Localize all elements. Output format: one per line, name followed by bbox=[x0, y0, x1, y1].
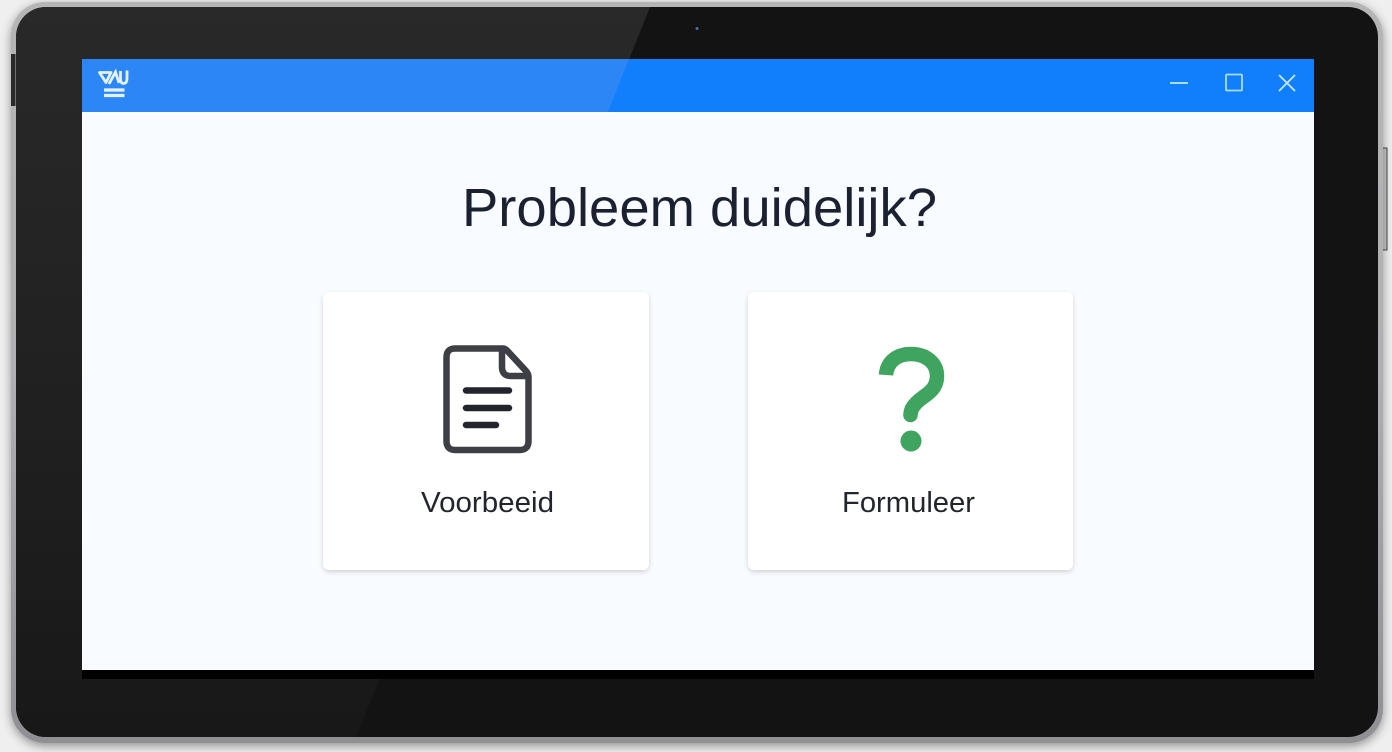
window body bbox=[82, 112, 1314, 670]
card: Formuleer bbox=[748, 292, 1073, 570]
camera bbox=[696, 27, 698, 30]
label: Voorbeeid bbox=[421, 487, 554, 519]
side button right bbox=[1383, 148, 1387, 250]
maximize icon bbox=[1226, 74, 1242, 90]
side button left bbox=[11, 54, 16, 106]
title bar glare bbox=[82, 59, 629, 112]
screen shadow strip bbox=[82, 670, 1314, 679]
app window bbox=[82, 59, 1314, 670]
close icon bbox=[1279, 75, 1295, 91]
bezel glare bbox=[16, 7, 650, 737]
app logo bbox=[100, 70, 127, 96]
heading: Probleem duidelijk? bbox=[462, 178, 937, 238]
title bar bbox=[82, 59, 1314, 112]
icon: question mark bbox=[886, 354, 937, 452]
card: Voorbeeid bbox=[323, 292, 649, 570]
icon: document bbox=[446, 348, 528, 450]
label: Formuleer bbox=[842, 487, 975, 519]
minimize icon bbox=[1170, 82, 1188, 84]
